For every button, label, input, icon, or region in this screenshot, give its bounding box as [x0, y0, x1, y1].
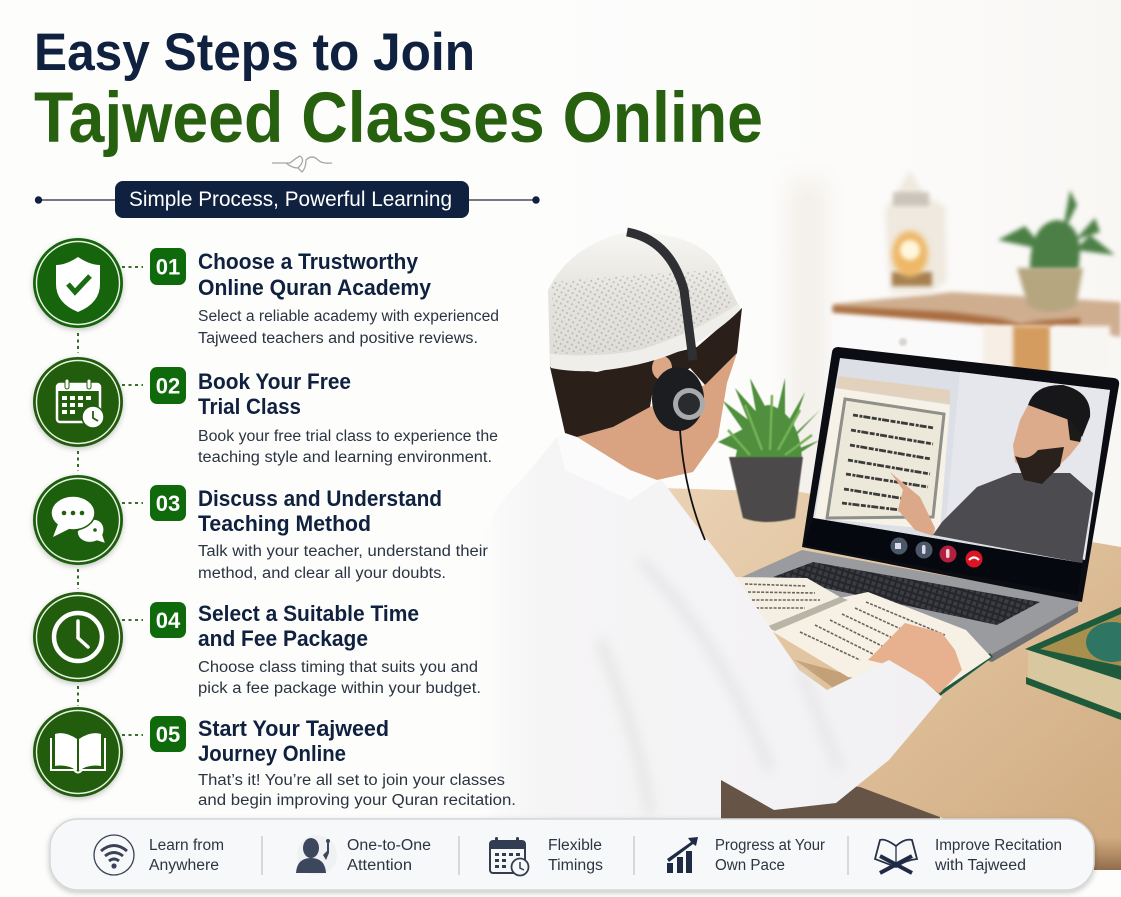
subtitle pill with side lines — [35, 181, 540, 218]
subtitle pill with side lines: Simple Process, Powerful Learning — [129, 188, 452, 211]
benefit: flexible timings: Timings — [548, 857, 603, 874]
number badge 05: 05 — [156, 722, 180, 747]
step 2 heading: Book Your Free — [198, 369, 351, 394]
number badge 02 — [150, 367, 186, 404]
open Quran on desk — [733, 577, 993, 700]
bottom benefits bar — [50, 819, 1094, 890]
icon: person with raised hand — [296, 835, 337, 875]
step 4 heading — [198, 601, 419, 651]
step 3 heading: Discuss and Understand — [198, 486, 442, 511]
step 2 heading — [198, 369, 351, 419]
icon: speech bubbles — [33, 475, 123, 565]
step 1 description: Select a reliable academy with experienced — [198, 308, 499, 325]
benefit: learn from anywhere: Learn from — [149, 837, 224, 854]
benefit: progress at your own pace: Own Pace — [715, 857, 785, 874]
step 1 heading: Choose a Trustworthy — [198, 249, 419, 274]
benefit: improve recitation with Tajweed — [875, 837, 1062, 874]
step 4 heading: Select a Suitable Time — [198, 601, 419, 626]
step 4 — [33, 592, 481, 697]
benefit: improve recitation with Tajweed: with Tajweed — [934, 857, 1026, 874]
step 5 heading — [198, 716, 389, 766]
step 2 description — [198, 428, 498, 466]
benefit: one-to-one attention — [296, 835, 431, 875]
step 3 heading: Teaching Method — [198, 511, 371, 536]
blurred lantern — [885, 170, 947, 293]
title: Tajweed Classes Online — [34, 79, 763, 158]
headset — [627, 232, 705, 540]
step 2 description: Book your free trial class to experience the — [198, 428, 498, 445]
step 4 description: Choose class timing that suits you and — [198, 659, 478, 676]
green Quran on desk — [1025, 607, 1121, 720]
step 2 heading: Trial Class — [198, 394, 301, 419]
benefit: progress at your own pace: Progress at Your — [715, 837, 825, 854]
step 3 — [33, 475, 488, 582]
title: Easy Steps to Join — [34, 23, 475, 82]
step 5 heading: Journey Online — [198, 741, 346, 766]
room wall and furniture — [520, 0, 1121, 560]
boy's hand — [868, 623, 962, 693]
benefit: one-to-one attention: One-to-One — [347, 837, 431, 854]
icon: Quran on rehal stand — [875, 840, 917, 873]
step 2 description: teaching style and learning environment. — [198, 449, 492, 466]
blurred plant on shelf — [998, 190, 1115, 312]
number badge 02: 02 — [156, 374, 180, 398]
knitted white prayer cap — [548, 232, 740, 371]
number badge 04: 04 — [156, 608, 181, 633]
benefit: flexible timings — [490, 837, 603, 876]
number badge 01 — [150, 248, 186, 285]
ornament under title — [272, 156, 332, 172]
step 2 — [33, 357, 498, 466]
icon: calendar with clock — [490, 837, 528, 876]
number badge 03 — [150, 485, 186, 521]
boy in white robe — [470, 432, 942, 819]
number badge 04 — [150, 602, 186, 638]
step 5 description: and begin improving your Quran recitation. — [198, 792, 516, 809]
teacher — [890, 385, 1093, 563]
step 3 heading — [198, 486, 442, 536]
step 1 description — [198, 308, 499, 347]
step 1 heading: Online Quran Academy — [198, 275, 432, 300]
number badge 03: 03 — [156, 491, 180, 516]
icon: shield with check — [33, 238, 123, 328]
Quran page on screen — [815, 388, 950, 530]
step 4 description — [198, 659, 481, 697]
wooden desk — [660, 488, 1121, 870]
photo: student in online Tajweed class — [470, 0, 1121, 870]
step 1 — [33, 238, 499, 347]
potted plant — [718, 378, 820, 522]
number badge 01: 01 — [156, 254, 180, 280]
benefit: flexible timings: Flexible — [548, 837, 602, 854]
number badge 05 — [150, 716, 186, 752]
step 5 description — [198, 772, 516, 809]
benefit: learn from anywhere — [94, 835, 224, 875]
step 3 description: Talk with your teacher, understand their — [198, 543, 488, 560]
step 1 description: Tajweed teachers and positive reviews. — [198, 330, 478, 347]
laptop screen frame — [802, 347, 1119, 602]
benefit: improve recitation with Tajweed: Improve Recitation — [935, 837, 1062, 854]
timeline connectors — [78, 267, 143, 735]
step 5 description: That’s it! You’re all set to join your classes — [198, 772, 505, 789]
benefit: progress at your own pace — [667, 837, 825, 874]
step 3 description — [198, 543, 488, 582]
benefit: learn from anywhere: Anywhere — [149, 857, 219, 874]
video call screen — [804, 358, 1110, 595]
step 4 description: pick a fee package within your budget. — [198, 680, 481, 697]
icon: calendar with clock — [33, 357, 123, 447]
icon: clock — [33, 592, 123, 682]
title — [34, 23, 763, 158]
icon: wifi — [94, 835, 134, 875]
step 4 heading: and Fee Package — [198, 626, 368, 651]
benefit: one-to-one attention: Attention — [347, 857, 412, 874]
icon: rising bar chart — [667, 837, 698, 873]
step 3 description: method, and clear all your doubts. — [198, 565, 446, 582]
step 5 heading: Start Your Tajweed — [198, 716, 389, 741]
call control bar — [804, 518, 1082, 595]
step 5 — [33, 707, 516, 809]
icon: open book — [33, 707, 123, 797]
step 1 heading — [198, 249, 432, 300]
boy's head, hair and neck — [550, 308, 742, 480]
laptop base and keyboard — [742, 550, 1080, 662]
